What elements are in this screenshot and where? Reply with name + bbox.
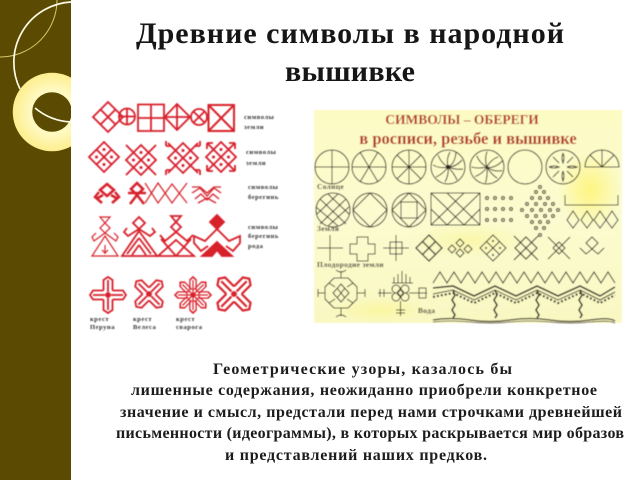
label: kin bereginya	[248, 224, 279, 250]
left decorative sidebar	[0, 0, 71, 480]
label: earth symbols 1	[244, 114, 274, 131]
label: sun: Солнце	[317, 182, 344, 191]
label: earth symbols 2	[246, 149, 276, 167]
ornament 2	[378, 271, 427, 316]
title: Древние символы в народной	[136, 17, 564, 50]
row 5: crosses	[90, 275, 253, 313]
title	[136, 17, 564, 88]
water zigzag	[433, 272, 615, 323]
label: kin bereginya: символы	[248, 224, 278, 231]
row: fertility of the earth	[317, 235, 604, 261]
cross labels: Перуна	[90, 324, 115, 331]
figure 3	[158, 216, 194, 256]
white arc	[14, 2, 71, 122]
body text: письменности (идеограммы), в которых раскрывается мир образов	[116, 425, 624, 442]
label: kin bereginya: рода	[248, 243, 264, 250]
title: вышивке	[285, 55, 415, 88]
figure 1	[92, 217, 118, 256]
panel heading: в росписи, резьбе и вышивке	[359, 129, 577, 148]
body text: и представлений наших предков.	[225, 447, 487, 464]
cross labels: крест	[133, 316, 152, 323]
panel: protective symbols	[314, 110, 622, 323]
fourth cross	[215, 275, 253, 313]
panel heading	[359, 112, 577, 148]
body text: Геометрические узоры, казалось бы	[213, 361, 512, 378]
cross labels: крест	[90, 316, 109, 323]
label: kin bereginya: берегинь	[248, 233, 279, 240]
thin yellow arc	[0, 0, 57, 57]
label: earth symbols 1: земли	[244, 124, 264, 131]
row: water, ornament 1	[318, 270, 365, 317]
body text: значение и смысл, предстали перед нами строчками древнейшей	[120, 404, 622, 421]
label: earth symbols 2: земли	[246, 160, 266, 167]
cross labels: сварога	[176, 324, 203, 331]
label: earth symbols 1: символы	[244, 114, 274, 121]
row 3: bereginya symbols	[95, 183, 221, 204]
row: sun symbols	[315, 146, 619, 188]
label: water: Вода	[418, 306, 435, 315]
figure 2	[122, 217, 157, 256]
cross of Veles	[133, 278, 165, 310]
row: earth symbols	[316, 186, 618, 236]
label: fertility: Плодородие земли	[317, 260, 384, 269]
label: bereginya symbols: символы	[248, 184, 278, 191]
label: earth symbols 2: символы	[246, 149, 276, 156]
cross labels: крест	[176, 316, 195, 323]
yellow ring	[22, 82, 82, 142]
cross labels: Велеса	[133, 324, 157, 331]
body text	[116, 361, 624, 464]
panel: red embroidery symbols	[89, 102, 279, 331]
row 2: earth symbols with dots	[89, 141, 236, 175]
cross labels	[90, 316, 203, 331]
figure 4	[194, 215, 240, 256]
label: bereginya symbols	[248, 184, 279, 201]
panel heading: СИМВОЛЫ – ОБЕРЕГИ	[385, 112, 539, 127]
cross of Perun	[90, 277, 126, 313]
row 1: earth symbols	[93, 102, 234, 132]
label: earth: Земля	[317, 224, 339, 233]
cross of Svarog	[175, 277, 211, 313]
body text: лишенные содержания, неожиданно приобрели конкретное	[131, 382, 597, 399]
row 4: bereginya of the kin figures	[92, 215, 240, 256]
label: bereginya symbols: берегинь	[248, 194, 279, 201]
